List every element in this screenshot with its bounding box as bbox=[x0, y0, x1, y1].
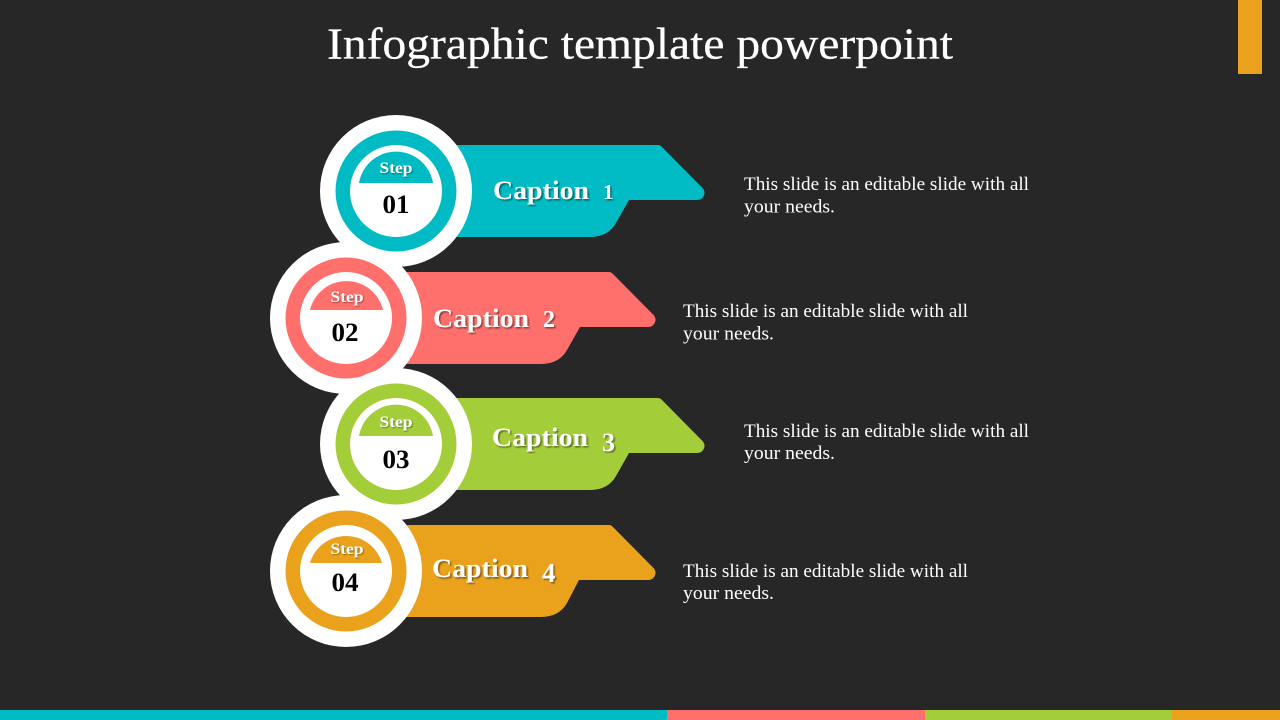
badge 4 bbox=[270, 495, 422, 647]
badge 4: Step bbox=[330, 541, 364, 558]
badge 3: 03 bbox=[382, 445, 410, 474]
description 2: your needs. bbox=[683, 324, 774, 344]
ribbon 3 bbox=[440, 398, 704, 490]
caption 4: 4 bbox=[542, 558, 556, 588]
step 2 bbox=[270, 242, 968, 394]
caption 1: 1 bbox=[603, 180, 614, 204]
caption 2: Caption bbox=[433, 304, 530, 333]
badge 2 bbox=[270, 242, 422, 394]
description 3: your needs. bbox=[744, 443, 835, 464]
badge 3 bbox=[320, 368, 472, 520]
ribbon 2 bbox=[390, 272, 655, 364]
caption 3: 3 bbox=[602, 428, 615, 457]
step 4 bbox=[270, 495, 968, 647]
badge 4: 04 bbox=[332, 568, 358, 597]
description 1: your needs. bbox=[744, 196, 835, 218]
ribbon 1 bbox=[440, 145, 704, 237]
description 3: This slide is an editable slide with all bbox=[744, 421, 1029, 442]
caption 4: Caption bbox=[432, 554, 529, 583]
badge 2: 02 bbox=[332, 318, 358, 347]
corner accent bar bbox=[1238, 0, 1262, 74]
title: Infographic template powerpoint bbox=[327, 20, 953, 68]
badge 1: 01 bbox=[382, 190, 410, 219]
badge 1 bbox=[320, 115, 472, 267]
bottom colour strip bbox=[0, 710, 1280, 720]
step 1 bbox=[320, 115, 1029, 267]
ribbon 4 bbox=[390, 525, 655, 617]
step 3 bbox=[320, 368, 1029, 520]
caption 2: 2 bbox=[543, 307, 555, 333]
badge 2: Step bbox=[330, 289, 364, 306]
description 4: This slide is an editable slide with all bbox=[683, 561, 968, 582]
description 1: This slide is an editable slide with all bbox=[744, 174, 1029, 195]
caption 1: Caption bbox=[493, 176, 590, 205]
caption 3: Caption bbox=[492, 423, 589, 452]
badge 1: Step bbox=[380, 160, 412, 177]
description 2: This slide is an editable slide with all bbox=[683, 301, 968, 322]
description 4: your needs. bbox=[683, 583, 774, 604]
badge 3: Step bbox=[380, 414, 412, 431]
